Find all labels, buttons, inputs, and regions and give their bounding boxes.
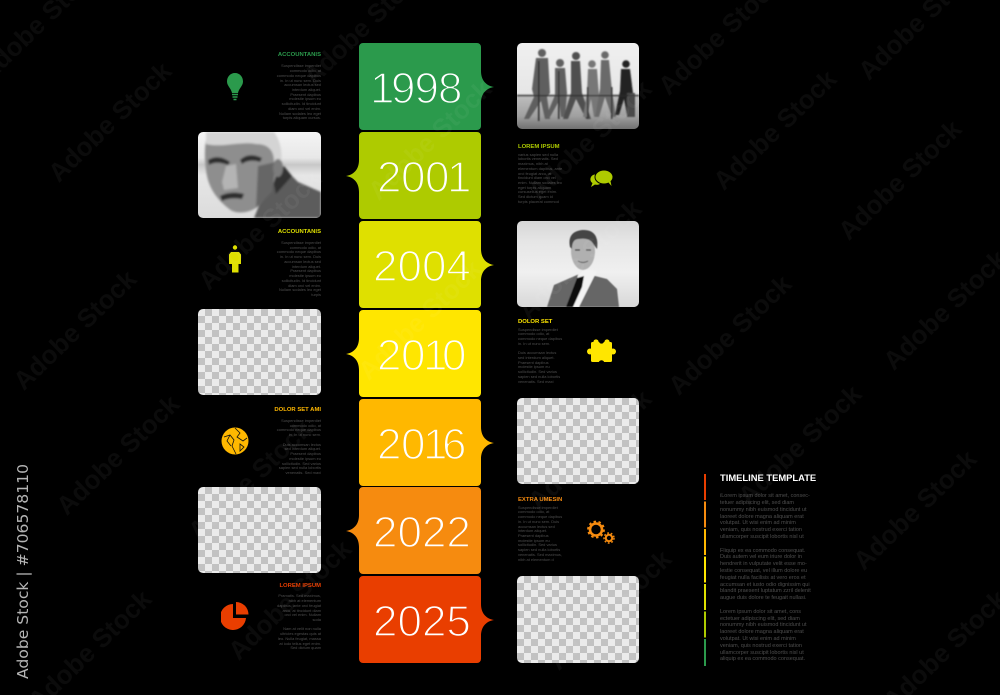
text block: extra umesin: Praesent dapibus (518, 533, 549, 538)
text block: accountants green: molestie ipsum eu (289, 96, 321, 101)
description text: volutpat. Ut wisi enim ad minim (720, 636, 796, 642)
text block: lorem ipsum red: orci vel enim. Nullam (284, 612, 321, 617)
text block: extra umesin: molestie ipsum eu (518, 538, 550, 543)
text block: accountants yellow: diam orci vel enim. (288, 283, 321, 288)
text block: dolor set ami: venenatis. Sed maxi (286, 470, 321, 475)
photo: older man portrait (198, 132, 321, 218)
text block: extra umesin: nibh at elementum d (518, 557, 554, 562)
text block: extra umesin: interdum aliquet. (518, 528, 547, 533)
text block: accountants green: sollicitudin. Id tincidunt (282, 101, 321, 106)
text block: lorem ipsum red: dapibus, ante orci feugiat (277, 603, 321, 608)
text block: lorem ipsum red: at iodo tellus eget enim. (279, 641, 321, 646)
watermark overlay: Adobe Stock (847, 444, 982, 576)
text block: dolor set ami: molestie ipsum eu (289, 456, 321, 461)
text block: accountants yellow: in. In ut nunc sem. Duis (280, 254, 321, 259)
text block: lorem ipsum red (277, 583, 321, 650)
icon: speech bubbles (590, 170, 612, 187)
watermark overlay: Adobe Stock (542, 544, 677, 676)
text block: lorem ipsum red: Sed dictum quam (290, 645, 321, 650)
text block: accountants yellow: sollicitudin. Id tincidunt (282, 278, 321, 283)
description text: lestie consequat, vel illum dolore eu (720, 568, 807, 574)
watermark overlay: Adobe Stock (182, 414, 317, 546)
watermark overlay: Adobe Stock (352, 254, 487, 386)
stock id side label: Adobe Stock | #706578110 (14, 464, 32, 679)
text block: dolor set yellow: commodo neque dapibus (518, 336, 562, 341)
text block: extra umesin: in. In ut nunc sem. Duis (518, 519, 559, 524)
text block: lorem ipsum red: Pramatis. Sed maximus, (278, 593, 321, 598)
description text: Duis autem vel eum iriure dolor in (720, 554, 802, 560)
photo: businessman in suit (517, 221, 639, 307)
text block: dolor set ami: sed interdum aliquet. (284, 446, 321, 451)
text block: dolor set yellow: DOLOR SET (518, 319, 552, 325)
image placeholder left 2022 (198, 487, 321, 573)
description text: nonummy nibh euismod tincidunt ut (720, 622, 807, 628)
text block: accountants yellow: accumsan lectus sed (284, 259, 321, 264)
text block: extra umesin: sollicitudin. Sed varius (518, 542, 557, 547)
watermark overlay: Adobe Stock (832, 114, 967, 246)
text block: dolor set yellow: molestie ipsum eu (518, 364, 550, 369)
text block: lorem ipsum red: leo. Nulla feugiat, massa (278, 636, 321, 641)
year block 2016 (359, 399, 494, 486)
year block 2004 (359, 221, 494, 308)
text block: accountants green: diam orci vel enim. (288, 106, 321, 111)
text block: accountants yellow: interdum aliquet. (292, 264, 321, 269)
text block: accountants green: commodo neque dapibus (277, 73, 321, 78)
year block 2022: 2022 (373, 508, 471, 557)
description text: ullamcorper suscipit lobortis nisl ut (720, 534, 804, 540)
text block: lorem ipsum lime: enim. Nullam sodales leo (518, 180, 562, 185)
watermark overlay: Adobe Stock (662, 269, 797, 401)
legend colour bar (704, 474, 706, 666)
icon: light bulb (227, 73, 243, 100)
text block: accountants green: Praesent dapibus (290, 92, 321, 97)
watermark overlay: Adobe Stock (7, 264, 142, 396)
text block: lorem ipsum lime: LOREM IPSUM (518, 144, 560, 150)
text block: accountants green: ACCOUNTANIS (278, 52, 321, 58)
year block 2010: 2010 (377, 331, 466, 380)
text block: dolor set ami: sollicitudin. Sed varius (282, 461, 321, 466)
description text: Fliquip ex ea commodo consequat. (720, 548, 805, 554)
year block 2022 (346, 487, 481, 574)
description text: augue duis dolore te feugait nullasi. (720, 595, 807, 601)
description text (720, 493, 811, 662)
year block 2016: 2016 (377, 420, 466, 469)
text block: accountants green: turpis aliquam cursus. (283, 115, 321, 120)
text block: extra umesin (518, 497, 562, 562)
text block: accountants yellow: Praesent dapibus (290, 268, 321, 273)
text block: dolor set yellow: commodo odio, at (518, 331, 549, 336)
watermark overlay: Adobe Stock (522, 74, 657, 206)
description text: nonummy nibh euismod tincidunt ut (720, 507, 807, 513)
text block: extra umesin: commodo neque dapibus (518, 514, 562, 519)
text block: accountants green: Suspendisse imperdiet (281, 63, 321, 68)
text block: lorem ipsum red: ultricies egestas quis at (280, 631, 321, 636)
description text: blandit praesent luptatum zzril delenit (720, 588, 811, 594)
text block: lorem ipsum lime (518, 144, 562, 204)
year block 2025 (359, 576, 494, 663)
text block: lorem ipsum lime: tincidunt diam orci vel (518, 175, 556, 180)
text block: accountants yellow: ACCOUNTANIS (278, 229, 321, 235)
text block: dolor set yellow (518, 319, 562, 384)
text block: lorem ipsum lime: elementum dapibus, ante (518, 166, 562, 171)
text block: dolor set yellow: Praesent dapibus (518, 360, 549, 365)
text block: accountants green: in. In ut nunc sem. Duis (280, 78, 321, 82)
text block: extra umesin: EXTRA UMESIN (518, 497, 562, 503)
text block: accountants yellow: commodo neque dapibus (277, 249, 321, 254)
description text: accumsan et iusto odio dignissim qui (720, 582, 810, 588)
description text: laoreet dolore magna aliquam erat (720, 629, 804, 635)
text block: accountants yellow: Suspendisse imperdiet (281, 240, 321, 245)
year block 2001: 2001 (377, 153, 471, 202)
image placeholder right 2016 (517, 398, 639, 484)
watermark overlay: Adobe Stock (707, 64, 842, 196)
watermark overlay: Adobe Stock (222, 534, 357, 666)
text block: dolor set ami: sapien sed nulla lobortis (279, 465, 321, 470)
year block 2025: 2025 (373, 597, 471, 646)
photo: business people walking (517, 43, 639, 129)
image placeholder right 2025 (517, 576, 639, 663)
watermark overlay: Adobe Stock (522, 384, 657, 516)
text block: extra umesin: accumsan lectus sed (518, 524, 555, 529)
text block: lorem ipsum red: LOREM IPSUM (279, 583, 321, 589)
text block: dolor set ami (274, 407, 321, 475)
text block: accountants green: commodo odio, at (290, 68, 321, 73)
image placeholder left 2010 (198, 309, 321, 395)
icon: globe (222, 428, 248, 454)
text block: lorem ipsum lime: orci feugiat arcu, at (518, 171, 552, 176)
description text: veniam, quis nostrud exerci tation (720, 643, 802, 649)
description text: tetuer adipiscing elit, sed diam (720, 500, 794, 506)
description text: aliquip ex ea commodo consequat. (720, 656, 805, 662)
text block: accountants yellow: turpis (311, 292, 321, 297)
text block: dolor set ami: in. In ut nunc sem. Duis accumsan lectus (283, 432, 321, 447)
text block: lorem ipsum lime: eget turpis aliquam (518, 185, 551, 190)
text block: accountants yellow: Nullam sodales leo eget (279, 287, 321, 292)
text block: extra umesin: Suspendisse imperdiet (518, 505, 558, 510)
watermark overlay: Adobe Stock (362, 74, 497, 206)
text block: extra umesin: sapien sed nulla lobortis (518, 547, 560, 552)
text block: dolor set ami: Praesent dapibus (290, 451, 321, 456)
icon: puzzle piece (587, 339, 616, 362)
text block: lorem ipsum lime: lobortis venenatis. Sed (518, 156, 558, 161)
year block 2001 (346, 132, 481, 219)
text block: lorem ipsum red: nibh at elementum (289, 598, 321, 603)
text block: accountants green (277, 52, 321, 120)
description text: volutpat. Ut wisi enim ad minim (720, 520, 796, 526)
description text: Lorem ipsum dolor sit amet, cons (720, 609, 801, 615)
text block: accountants green: Nullam sodales leo eget (279, 111, 321, 116)
icon: person (229, 245, 241, 272)
text block: dolor set yellow: venenatis. Sed maxi (518, 379, 553, 384)
watermark overlay: Adobe Stock (512, 194, 647, 326)
text block: dolor set yellow: sollicitudin. Sed varius (518, 369, 557, 374)
watermark overlay: Adobe Stock (732, 379, 867, 511)
text block: dolor set ami: Suspendisse imperdiet (281, 418, 321, 423)
text block: dolor set yellow: sapien sed nulla lobortis (518, 374, 560, 379)
text block: lorem ipsum lime: cursusellus eget enim. (518, 189, 557, 194)
text block: dolor set ami: commodo neque dapibus (277, 427, 321, 432)
description text: feugiat nulla facilisis at vero eros et (720, 575, 806, 581)
title: timeline template: TIMELINE TEMPLATE (720, 472, 816, 483)
text block: lorem ipsum red: soda Nam at velit non nulla (283, 617, 321, 631)
description text: laoreet dolore magna aliquam erat (720, 514, 804, 520)
text block: lorem ipsum red: arcu, at tincidunt diam (282, 608, 321, 612)
text block: extra umesin: commodo odio, at (518, 509, 549, 514)
text block: dolor set yellow: in. In ut nunc sem. Duis accumsan lectus (518, 341, 556, 355)
text block: lorem ipsum lime: turpis placerat commod (518, 199, 559, 204)
icon: gears (587, 520, 615, 544)
year block 1998: 1998 (370, 64, 462, 113)
description text: hendrerit in vulputate velit esse mo- (720, 561, 807, 567)
text block: dolor set ami: DOLOR SET AMI (274, 407, 321, 413)
text block: lorem ipsum lime: Sed dictum quam id (518, 194, 553, 199)
year block 2004: 2004 (373, 242, 471, 291)
description text: veniam, quis nostrud exerci tation (720, 527, 802, 533)
text block: extra umesin: venenatis. Sed maximus, (518, 552, 562, 557)
watermark overlay: Adobe Stock (50, 389, 185, 521)
watermark overlay: Adobe Stock (42, 56, 177, 188)
text block: accountants green: interdum aliquet. (292, 87, 321, 92)
text block: lorem ipsum lime: varius sapien sed nulla (518, 152, 558, 157)
text block: dolor set ami: commodo odio, at (290, 423, 321, 428)
icon: pie chart (221, 602, 248, 630)
text block: accountants yellow: commodo odio, at (290, 245, 321, 250)
year block 2010 (346, 310, 481, 397)
text block: dolor set yellow: Suspendisse imperdiet (518, 327, 558, 332)
description text: ectetuer adipiscing elit, sed diam (720, 616, 800, 622)
text block: accountants yellow (277, 229, 321, 297)
year block 1998 (359, 43, 494, 130)
text block: accountants yellow: molestie ipsum eu (289, 273, 321, 278)
text block: accountants green: accumsan lectus sed (284, 82, 321, 87)
text block: lorem ipsum lime: maximus, nibh at (518, 161, 548, 166)
description text: ullamcorper suscipit lobortis nisl ut (720, 650, 804, 656)
description text: iLorem ipsum dolor sit amet, consec- (720, 493, 810, 499)
text block: dolor set yellow: sed interdum aliquet. (518, 355, 555, 360)
watermark overlay: Adobe Stock (192, 164, 327, 296)
